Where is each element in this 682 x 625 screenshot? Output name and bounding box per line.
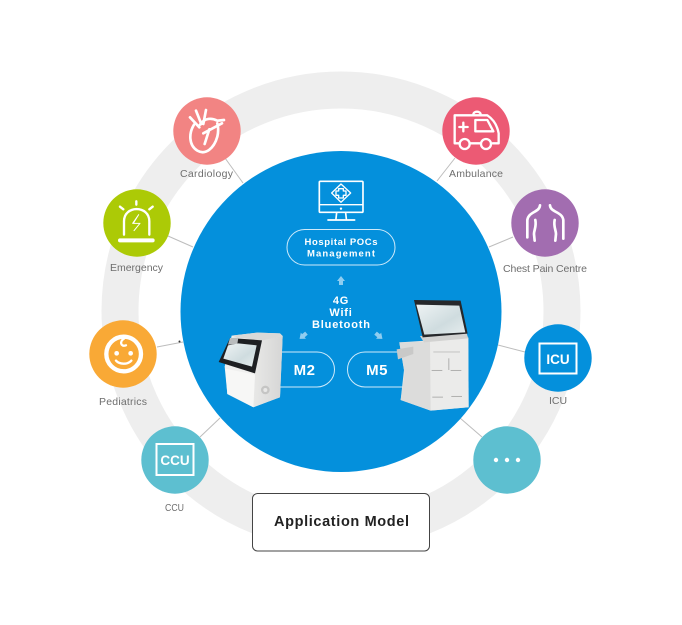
connectivity text — [312, 295, 370, 331]
device: M2 analyser — [219, 333, 283, 407]
connectivity text: Wifi — [329, 307, 353, 319]
title box: Application Model — [252, 494, 430, 551]
pill: Hospital POCs Management — [287, 230, 395, 265]
connectivity text: Bluetooth — [312, 319, 370, 331]
arrow: to M2 — [297, 330, 309, 342]
connector lines — [157, 158, 525, 437]
device: M5 analyser — [397, 300, 469, 411]
label: Ambulance: Ambulance — [449, 168, 503, 180]
pill: Hospital POCs Management: Management — [307, 248, 376, 260]
label: Chest Pain Centre: Chest Pain Centre — [503, 263, 587, 275]
label: Emergency: Emergency — [110, 262, 164, 274]
pill: M5 — [348, 352, 410, 387]
node: CCU — [141, 426, 209, 514]
label: Cardiology: Cardiology — [180, 168, 234, 180]
icon: hospital monitor — [319, 181, 363, 220]
node: more — [473, 426, 541, 494]
pill: Hospital POCs Management: Hospital POCs — [304, 237, 378, 248]
node: Chest Pain Centre — [503, 189, 587, 275]
node: ICU — [524, 324, 592, 407]
arrow: to M5 — [373, 330, 385, 342]
central blue circle — [180, 151, 502, 472]
node: Pediatrics — [89, 320, 157, 408]
connectivity text: 4G — [333, 295, 349, 307]
arrow: up to management — [337, 276, 345, 285]
node: Ambulance — [442, 97, 510, 180]
label: Pediatrics: Pediatrics — [99, 396, 147, 408]
pill: M2: M2 — [294, 362, 315, 379]
pill: M2 — [270, 352, 334, 387]
title box: Application Model: Application Model — [274, 514, 409, 530]
label: ICU: ICU — [549, 395, 567, 407]
node: Cardiology — [173, 97, 241, 180]
node: Emergency — [103, 189, 171, 274]
label: CCU: CCU — [165, 502, 184, 514]
outer grey ring — [120, 90, 562, 532]
pill: M5: M5 — [366, 362, 388, 379]
node: CCU: CCU — [160, 453, 190, 468]
node: ICU: ICU — [546, 352, 570, 367]
